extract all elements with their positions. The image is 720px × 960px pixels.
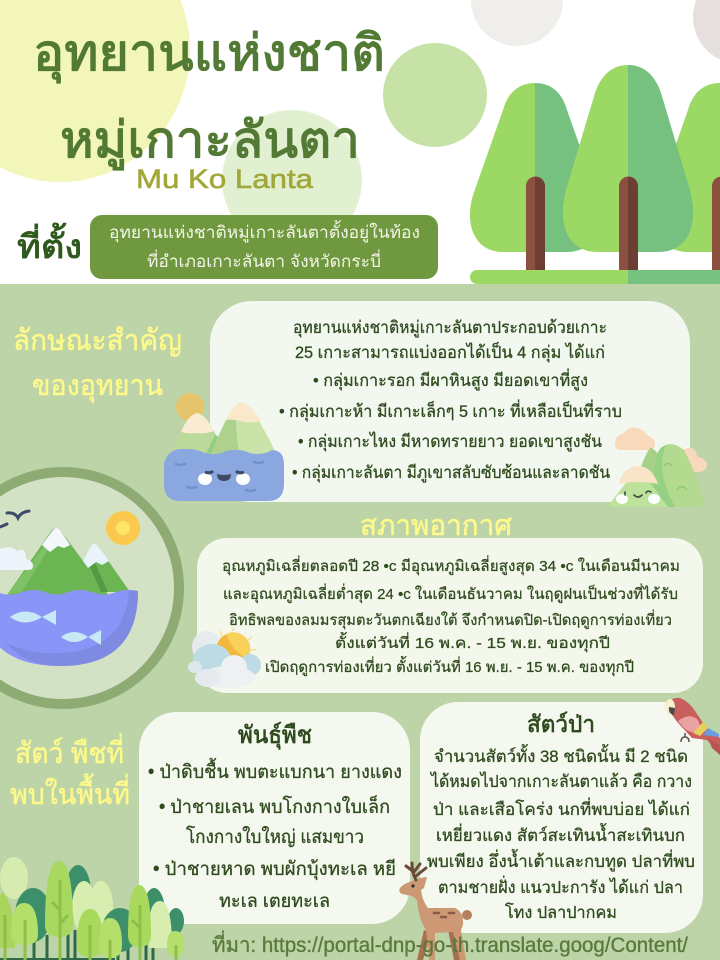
icon: fish — [10, 610, 56, 625]
panel: location: อุทยานแห่งชาติหมู่เกาะลันตาตั้งอยู่ในท้อง — [109, 220, 420, 243]
panel: key features: • กลุ่มเกาะห้า มีเกาะเล็กๆ 5 เกาะ ที่เหลือเป็นที่ราบ — [279, 399, 622, 422]
heading: climate: สภาพอากาศ — [360, 510, 513, 542]
panel: plants: พันธุ์พืช — [238, 721, 312, 750]
heading: flora and fauna — [10, 733, 130, 811]
icon: smiling mountain and water — [164, 393, 284, 501]
title: หมู่เกาะลันตา — [60, 112, 360, 170]
panel: wildlife: ได้หมดไปจากเกาะลันตาแล้ว คือ กวาง — [429, 771, 692, 791]
mountains — [7, 528, 130, 597]
panel: wildlife — [420, 702, 703, 933]
panel: plants: • ป่าชายเลน พบโกงกางใบเล็ก — [159, 794, 390, 818]
panel: climate: เปิดฤดูการท่องเที่ยว ตั้งแต่วันที่ 16 พ.ย. - 15 พ.ค. ของทุกปี — [265, 656, 634, 677]
icon: fish — [61, 630, 101, 645]
panel: key features: • กลุ่มเกาะรอก มีผาหินสูง มียอดเขาที่สูง — [313, 368, 588, 391]
source: ที่มา: https://portal-dnp-go-th.translate.goog/Content/ — [212, 930, 688, 957]
icon: sun behind clouds — [188, 628, 261, 688]
panel: wildlife: พบเพียง อึ่งน้ำเต้าและกบทูด ปลาที่พบ — [427, 849, 695, 872]
title — [33, 25, 385, 170]
panel: wildlife: จำนวนสัตว์ทั้ง 38 ชนิดนั้น มี 2 ชนิด — [434, 744, 688, 766]
title: อุทยานแห่งชาติ — [33, 25, 385, 83]
panel: plants: • ป่าชายหาด พบผักบุ้งทะเล หยี — [153, 858, 396, 881]
panel: key features: • กลุ่มเกาะไหง มีหาดทรายยาว ยอดเขาสูงชัน — [298, 431, 602, 452]
heading: location: ที่ตั้ง — [17, 223, 82, 265]
panel: climate — [197, 538, 703, 693]
heading: key features: ลักษณะสำคัญ — [13, 325, 182, 357]
panel: wildlife: ตามชายฝั่ง แนวปะการัง ได้แก่ ปลา — [438, 875, 683, 897]
icon: sun — [106, 511, 140, 545]
panel: climate: ตั้งแต่วันที่ 16 พ.ค. - 15 พ.ย. ของทุกปี — [335, 632, 610, 653]
panel: climate: อิทธิพลของลมมรสุมตะวันตกเฉียงใต้ จึงกำหนดปิด-เปิดฤดูการท่องเที่ยว — [229, 609, 672, 630]
panel: wildlife: โทง ปลาปากคม — [505, 902, 617, 922]
panel: wildlife: ป่า และเสือโคร่ง นกที่พบบ่อย ได้แก่ — [433, 797, 690, 819]
panel: location — [90, 215, 438, 279]
panel: climate: อุณหภูมิเฉลี่ยตลอดปี 28 •c มีอุณหภูมิเฉลี่ยสูงสุด 34 •c ในเดือนมีนาคม — [222, 555, 680, 576]
heading: flora and fauna: พบในพื้นที่ — [10, 773, 130, 811]
header background circles — [0, 0, 720, 250]
panel: wildlife: เหยี่ยวแดง สัตว์สะเทินน้ำสะเทินบก — [436, 823, 685, 845]
heading: flora and fauna: สัตว์ พืชที่ — [15, 733, 124, 770]
icon: deer — [399, 863, 472, 960]
panel: key features: • กลุ่มเกาะลันตา มีภูเขาสลับซับซ้อนและลาดชัน — [292, 463, 610, 483]
illustration: forest — [0, 857, 184, 960]
panel: wildlife: สัตว์ป่า — [527, 711, 595, 737]
illustration: trees — [470, 65, 720, 284]
bowl of water — [0, 590, 138, 666]
panel: key features: 25 เกาะสามารถแบ่งออกได้เป็น 4 กลุ่ม ได้แก่ — [295, 341, 605, 363]
heading: key features: ของอุทยาน — [32, 370, 163, 403]
panel: location: ที่อำเภอเกาะลันตา จังหวัดกระบี่ — [147, 249, 381, 271]
panel: plants: • ป่าดิบชื้น พบตะแบกนา ยางแดง — [148, 758, 402, 783]
panel: plants — [139, 712, 410, 924]
green background — [0, 284, 720, 960]
icon: cloud — [0, 547, 33, 570]
panel: plants: โกงกางใบใหญ่ แสมขาว — [186, 825, 364, 848]
panel: plants: ทะเล เตยทะเล — [219, 891, 330, 912]
panel: key features — [210, 301, 690, 502]
subtitle: Mu Ko Lanta — [136, 164, 314, 194]
icon: parrot — [665, 698, 720, 755]
illustration: island circle — [0, 472, 179, 704]
icon: smiling hill and clouds — [609, 428, 707, 507]
panel: key features: อุทยานแห่งชาติหมู่เกาะลันตาประกอบด้วยเกาะ — [293, 318, 607, 338]
panel: climate: และอุณหภูมิเฉลี่ยต่ำสุด 24 •c ในเดือนธันวาคม ในฤดูฝนเป็นช่วงที่ได้รับ — [223, 583, 678, 604]
heading: key features — [13, 325, 182, 403]
icon: birds — [0, 511, 29, 528]
